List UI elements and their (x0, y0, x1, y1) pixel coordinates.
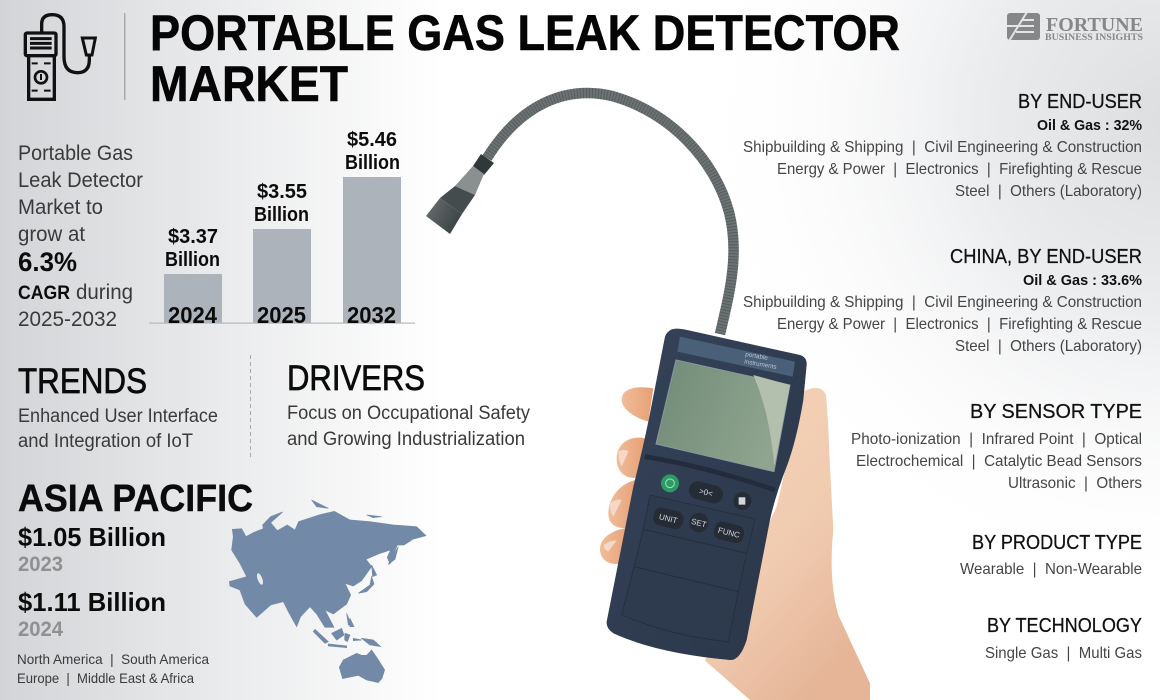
trends block: and Integration of IoT (18, 431, 193, 452)
title divider (124, 13, 126, 100)
segment: China by end-user: CHINA, BY END-USER (950, 246, 1142, 268)
segment: by sensor type: BY SENSOR TYPE (970, 401, 1142, 423)
bar chart: Billion (165, 248, 220, 271)
drivers block (287, 359, 530, 450)
segment: China by end-user: Energy & Power | Electronics | Firefighting & Rescue (777, 316, 1142, 333)
detector body (607, 329, 807, 660)
trends block (18, 362, 218, 452)
buttons: FUNC (717, 526, 741, 540)
CAGR text block: CAGR (18, 282, 70, 304)
segment: by end-user: Oil & Gas : 32% (1037, 117, 1142, 134)
CAGR text block: Leak Detector (18, 168, 143, 192)
bar chart: 2024 (168, 302, 217, 328)
sensor head (426, 154, 494, 234)
LCD screen (656, 360, 790, 472)
title: MARKET (150, 56, 348, 112)
CAGR text block: Market to (18, 195, 103, 219)
map: Asia Pacific (229, 500, 426, 683)
drivers block: and Growing Industrialization (287, 429, 525, 450)
gooseneck hose (487, 93, 734, 334)
segment: China by end-user: Shipbuilding & Shipping | Civil Engineering & Construction (743, 294, 1142, 311)
segment: by end-user: Steel | Others (Laboratory) (955, 183, 1142, 200)
segment: by product type: Wearable | Non-Wearable (960, 561, 1142, 578)
bar chart: $5.46 (347, 128, 397, 151)
segment: by sensor type: Photo-ionization | Infrared Point | Optical (851, 431, 1142, 448)
title (150, 5, 900, 112)
segment: by sensor type: Electrochemical | Catalytic Bead Sensors (856, 453, 1142, 470)
segment: by end-user: Energy & Power | Electronics | Firefighting & Rescue (777, 161, 1142, 178)
trends block: TRENDS (18, 362, 147, 401)
CAGR text block (18, 141, 143, 331)
segment: by sensor type (851, 401, 1142, 492)
hand (600, 387, 870, 700)
CAGR text block: 2025-2032 (18, 307, 117, 331)
regional block: Asia Pacific: ASIA PACIFIC (18, 478, 253, 520)
regional block: Asia Pacific: $1.11 Billion (18, 587, 166, 617)
bar chart: Billion (254, 203, 309, 226)
dashed divider (250, 355, 252, 458)
regional block: Asia Pacific: Europe | Middle East & Africa (17, 670, 194, 686)
CAGR text block: 6.3% (18, 247, 77, 277)
segment: China by end-user (743, 246, 1142, 355)
buttons (652, 474, 751, 545)
display label strip (677, 337, 795, 377)
segment: by technology: Single Gas | Multi Gas (985, 645, 1142, 662)
bar chart: Billion (345, 151, 400, 174)
trends block: Enhanced User Interface (18, 406, 218, 427)
bar chart: $3.55 (257, 180, 307, 203)
regional block: Asia Pacific: North America | South America (17, 651, 209, 667)
drivers block: DRIVERS (287, 359, 425, 398)
icon: gas leak detector (25, 15, 95, 99)
logo: Fortune Business Insights: FORTUNE (1046, 14, 1143, 36)
logo: Fortune Business Insights (1007, 12, 1143, 43)
bar chart: 2025 (257, 302, 306, 328)
display label strip: portable (745, 351, 769, 362)
regional block: Asia Pacific: 2024 (18, 618, 63, 641)
segment: China by end-user: Steel | Others (Laboratory) (955, 338, 1142, 355)
segment: by technology: BY TECHNOLOGY (987, 615, 1142, 637)
logo: Fortune Business Insights: BUSINESS INSIGHTS (1045, 33, 1143, 43)
bar chart: $3.37 (168, 225, 218, 248)
regional block: Asia Pacific: $1.05 Billion (18, 522, 166, 552)
photo: hand holding gas detector (426, 93, 870, 700)
segment: by end-user: BY END-USER (1018, 91, 1142, 113)
segment: by product type (960, 532, 1142, 578)
display label strip: instruments (744, 358, 777, 371)
drivers block: Focus on Occupational Safety (287, 403, 530, 424)
segment: by technology (985, 615, 1142, 662)
title: PORTABLE GAS LEAK DETECTOR (150, 5, 900, 61)
buttons: >0< (698, 486, 714, 499)
CAGR text block: grow at (18, 222, 85, 246)
segment: China by end-user: Oil & Gas : 33.6% (1023, 272, 1142, 289)
regional block: Asia Pacific: 2023 (18, 553, 63, 576)
bar chart: 2032 (347, 302, 396, 328)
regional block: Asia Pacific (17, 478, 253, 686)
buttons: UNIT (658, 512, 678, 525)
buttons: SET (690, 517, 708, 529)
CAGR text block: during (76, 280, 133, 304)
segment: by end-user: Shipbuilding & Shipping | Civil Engineering & Construction (743, 139, 1142, 156)
segment: by product type: BY PRODUCT TYPE (972, 532, 1142, 554)
segment: by end-user (743, 91, 1142, 200)
bar chart (149, 128, 415, 328)
CAGR text block: Portable Gas (18, 141, 133, 165)
segment: by sensor type: Ultrasonic | Others (1008, 475, 1142, 492)
